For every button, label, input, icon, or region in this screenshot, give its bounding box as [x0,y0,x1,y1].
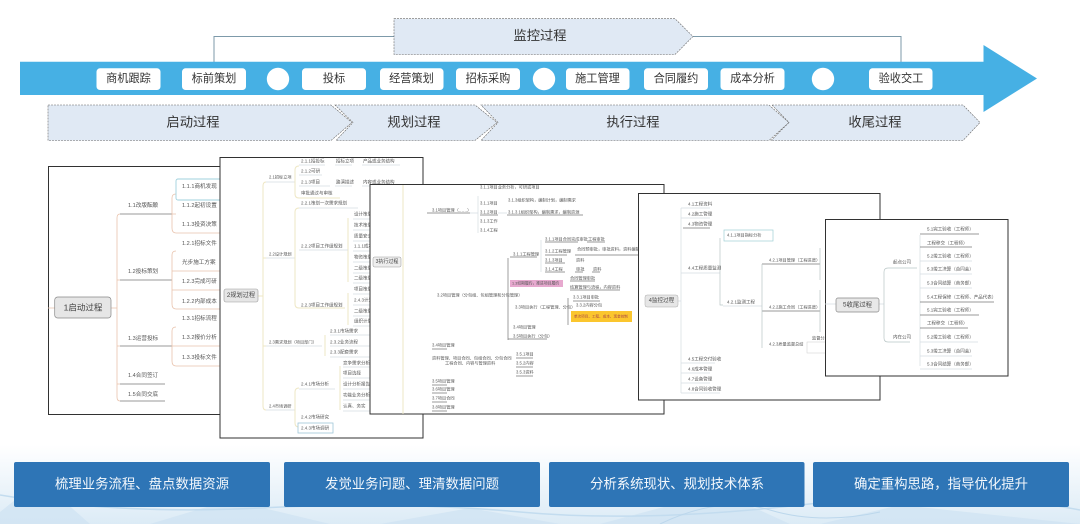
mind map panel 1: initiation [48,166,228,414]
node labels: 2.3.3配套需求 [330,348,359,356]
node labels [269,158,395,432]
boxed node [724,230,773,241]
root node: 5收尾过程 [843,300,873,308]
node labels: 3.7项目合同 [432,394,455,402]
node labels: 3.4项目管理 [432,342,455,348]
node labels: 3.1.1项目业务分析，可研或项目 [480,184,540,190]
node labels: 1.5合同交底 [128,390,159,398]
node labels: 1.4合同签订 [128,371,159,379]
root node [645,295,678,307]
node labels: 3.5项目管理 [432,378,455,384]
node labels: 设计分析报告 [343,380,370,388]
step: 合同履约: 合同履约 [654,71,698,85]
root node [373,257,401,267]
node labels: 1.2.2内部成本 [182,297,217,305]
node labels: 1.2.1招标文件 [182,239,217,247]
node labels: 4.2.1项目管理（工程进度） [769,256,820,264]
node labels: 结算管理与流程，内容资料 [570,284,621,290]
node labels: 3.1.3.1组织架构，编制需求，编制资源 [508,208,580,216]
node labels: 资料 [576,256,585,264]
step: 经营策划: 经营策划 [389,71,434,85]
root node: 4监控过程 [649,296,675,304]
process steps on the arrow [96,68,932,90]
node labels: 起点公司 [893,260,911,266]
node labels: 1.1.2起初设置 [182,201,217,209]
node labels: 二级策划 [354,274,372,282]
step: 施工管理 [566,68,630,90]
node labels: 5.3合同结算（商务部） [927,360,974,368]
main process arrow [20,45,1037,112]
node labels [893,226,996,368]
conclusion card 2: 发觉业务问题、理清数据问题 [325,476,499,492]
node labels: 2.1招标立项 [269,174,292,180]
node labels: 4.4工程质量监测 [688,264,722,272]
node labels: 合同预审批，审批资料，资料编制 [577,246,640,252]
step: 验收交工 [869,68,932,90]
node labels: 工程合同、内容与管理资料 [445,360,496,366]
node labels: 2.3需求规划（项目部门） [269,338,317,346]
monitoring process chevron [394,19,693,54]
initiation process chevron: 启动过程 [166,114,220,130]
node labels: 4.6成本管理 [688,366,713,372]
node labels: 4.2.2施工合同（工程进度） [769,304,820,310]
step: 标前策划 [182,68,246,90]
planning process chevron: 规划过程 [387,114,441,130]
node labels: 5.1完工验收（工程师） [927,306,974,314]
node labels [432,184,640,410]
node labels: 项目策划 [354,286,372,292]
node labels: 3.1.2工程管理 [545,248,572,254]
node labels: 2.3.1市场需求 [330,328,359,334]
step: 商机跟踪 [96,68,160,90]
boxed node [298,423,333,433]
node labels: 2.2设计规划 [269,250,292,258]
node labels: 竞争需求分析 [343,360,370,366]
node labels: 3.2项目管理（分包组、包组管理和分包管理） [437,292,522,298]
node labels: 3.1.4工程 [545,266,564,272]
node labels: 项目选择 [343,370,361,376]
conclusion card 3 [549,462,804,507]
node labels: 2.3.2业务流程 [330,338,359,346]
node labels: 3.8项目管理 [432,404,455,410]
mind map panel 4: monitoring [638,194,880,400]
highlighted yellow node [571,311,632,322]
node labels: 2.1.1招投标 [301,158,325,164]
root node [55,297,111,318]
node labels: 2.1.2可研 [301,168,321,174]
node labels: 认真、务实 [343,402,366,410]
node labels: 1.2.3完成可研 [182,277,217,285]
node labels: 1.1.1商机发现 [182,182,217,190]
mind map panel 2: planning [220,158,423,438]
node labels: 审批通过与审核 [301,190,333,196]
node labels: 5.3合同结算（商务部） [927,280,974,286]
conclusion card 1 [14,462,270,507]
node labels: 2.4.3市场调研 [301,424,330,432]
node labels: 4.2.3质量监督总结 [769,340,803,348]
step: 招标采购 [456,68,520,90]
node labels: 4.2施工管理 [688,210,713,218]
initiation process chevron [48,105,352,140]
node labels: 3.1.1项目 [480,200,498,206]
root node [836,298,879,312]
node labels: 合同管理审批 [570,274,596,282]
closing process chevron [771,105,980,140]
highlighted pink node [510,280,563,287]
node labels: 招标立项 [336,158,354,164]
highlighted yellow node: 单次项目、工程、成本、现金控制 [574,314,628,318]
node labels: 3.1.3工作 [480,218,499,224]
node labels: 物资策划 [354,254,372,260]
conclusion card 2 [284,462,540,507]
node labels: 3.6项目管理 [432,386,455,392]
step: 成本分析: 成本分析 [730,71,775,85]
execution process chevron [481,105,789,140]
step: 合同履约 [644,68,708,90]
node labels: 2.4.3计划 [354,296,374,304]
node labels: 3.5.3资料 [516,368,535,376]
conclusion card 4: 确定重构思路，指导优化提升 [854,476,1028,492]
step: 经营策划 [380,68,444,90]
closing process chevron: 收尾过程 [848,114,902,130]
node labels: 质量安全 [354,232,372,240]
execution process chevron: 执行过程 [606,114,660,130]
node labels: 5.2竣工验收（工程师） [927,252,974,260]
node labels [688,200,829,392]
node labels: 1.2投标策划 [128,267,159,275]
node labels: 4.3物资管理 [688,220,713,228]
node labels: 3.1.2项目 [480,210,498,216]
node labels: 3.5.1项目 [516,352,534,358]
node labels: 路演描述 [336,178,354,186]
node labels: 3.3.1项目审批 [573,294,600,300]
node labels: 监督分析 [812,334,829,342]
small note box [807,342,835,353]
node labels: 工程移交（工程师） [927,320,968,326]
node labels: 4.1.1项目指标分析 [727,232,761,238]
node labels: 2.2.1策划一次需求规划 [301,200,348,206]
node labels: 3.3项目执行（工程管理、分包） [515,304,575,310]
step: 商机跟踪: 商机跟踪 [106,71,151,85]
node labels: 产品或业务结构 [363,158,395,164]
node labels: 4.5工程交付验收 [688,356,722,362]
node labels: 资料管理、项目合同、包组合同、分包合同 [432,354,512,362]
node labels: 内容或业务结构 [363,178,395,186]
node labels: 4.1工程资料 [688,200,713,208]
node labels: 组织计划 [354,318,372,324]
mind map panel 5: closing [825,220,1008,376]
step: 成本分析 [720,68,784,90]
node labels: 5.2竣工验收（工程师） [927,334,974,340]
step: empty circle 3 [812,68,834,90]
conclusion card 4 [813,462,1069,507]
node labels: 3.1.3组织架构，编制计划，编制需求 [508,196,577,204]
step: empty circle 1 [267,68,289,90]
node labels: 4.8合同验收管理 [688,386,722,392]
node labels: 3.1.3项目 [545,258,563,264]
node labels: 2.2.2项目工作组规划 [301,242,343,250]
node labels: 1.3运营投标 [128,334,159,342]
node labels: 工程审批 [588,236,606,242]
node labels: 二级策划 [354,264,372,272]
node labels: 2.4市场调研 [269,402,292,410]
node labels: 内在公司 [893,334,911,340]
node labels: 2.4.1市场分析 [301,380,330,388]
node labels: 5.3竣工决算（合同会） [927,348,974,354]
node labels: 2.1.3项目 [301,180,320,186]
node labels: 3.1.4工程 [480,226,499,234]
node labels: 5.3竣工决算（合同会） [927,266,974,272]
highlighted pink node: 1.3如期履约，推进项目履约 [512,280,559,286]
node labels: 3.5.2内容 [516,360,534,366]
mind map panel 3: execution [370,184,664,414]
monitoring process chevron: 监控过程 [513,28,567,43]
node labels: 功能业务分析 [343,392,370,398]
node labels: 1.1.1成本 [354,242,374,250]
step: 投标 [302,68,366,90]
root node: 3执行过程 [376,258,398,265]
step: 招标采购: 招标采购 [466,71,510,85]
root node: 1启动过程 [64,302,103,312]
node labels: 1.1.3投资决策 [182,220,217,228]
node labels: 审批 [576,266,585,272]
node labels: 技术策划 [354,222,372,228]
node labels: 3.3.2内容分包 [576,302,603,308]
step: 验收交工: 验收交工 [879,71,923,85]
node labels: 光步施工方案 [182,258,216,266]
node labels: 3.5项目执行（分包） [513,332,552,340]
node labels: 1.3.3投标文件 [182,353,217,361]
step: 施工管理: 施工管理 [575,71,620,85]
node labels: 4.2.1监测工程 [727,298,756,306]
node labels: 5.1完工验收（工程师） [927,226,974,232]
node labels: 3.1.1项目合同完成审批 [545,236,589,242]
step: 标前策划: 标前策划 [192,71,236,85]
step: 投标: 投标 [323,71,345,85]
node labels: 3.4项目管理 [513,324,536,330]
node labels: 设计策划 [354,210,372,218]
step: empty circle 2 [533,68,555,90]
node labels: 4.7设备管理 [688,376,713,382]
root node: 2规划过程 [227,291,255,299]
node labels [128,182,217,398]
node labels: 5.4工程保修（工程师、产品代表） [927,294,996,300]
node labels: 2.4.2市场研究 [301,414,330,420]
connector: monitoring process to tracking line [214,36,901,62]
background texture: pale blue waves [0,445,1080,524]
node labels: 1.1改版酝酿 [128,201,159,209]
conclusion card 3: 分析系统现状、规划技术体系 [590,476,764,492]
node labels: 工程移交（工程师） [927,240,968,246]
node labels: 2.2.3项目工作组规划 [301,302,343,308]
node labels: 资料 [593,266,602,272]
highlighted node [176,179,226,200]
node labels: 3.1项目管理（……） [432,206,471,214]
node labels: 二级策划 [354,308,372,314]
node labels: 1.3.2报价分析 [182,333,217,341]
conclusion card 1: 梳理业务流程、盘点数据资源 [55,476,229,492]
planning process chevron [335,105,497,140]
node labels: 3.1.1工程管理 [513,250,540,258]
node labels: 1.3.1招标流程 [182,314,217,322]
root node [224,289,258,302]
